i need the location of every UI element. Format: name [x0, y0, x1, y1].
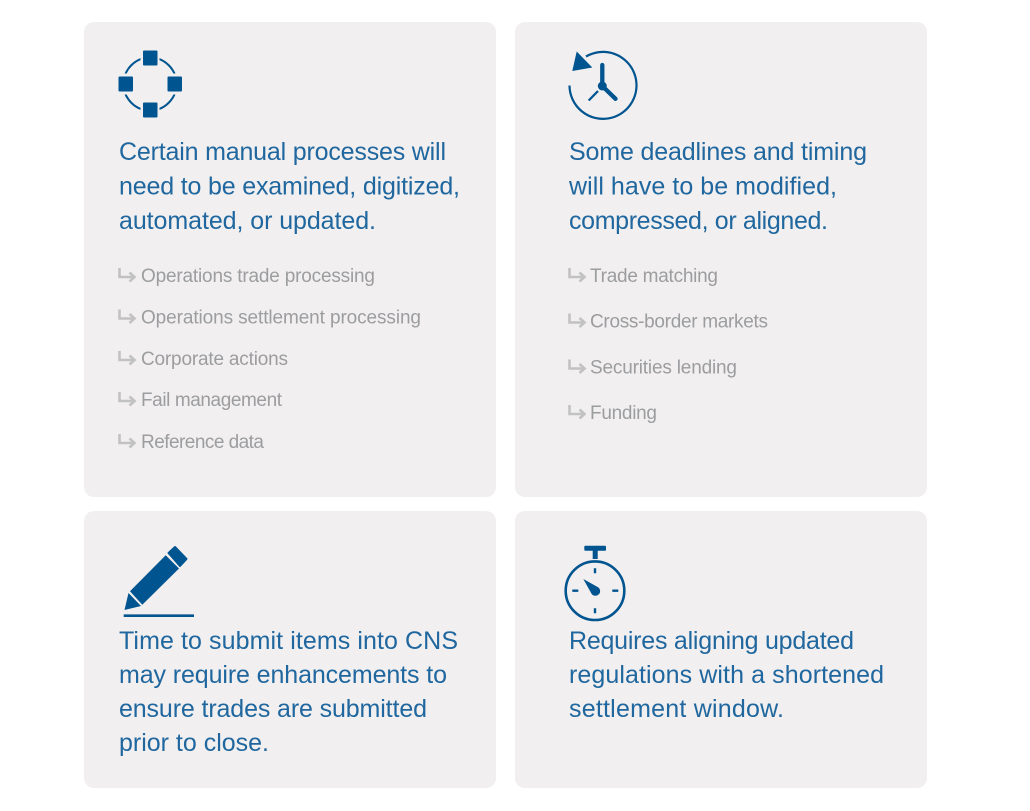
heading: submission time: prior to close. — [119, 729, 269, 757]
heading: deadlines and timing: Some deadlines and timing — [569, 138, 867, 166]
list: manual process items: Reference data — [141, 432, 264, 453]
panel: submission time — [84, 511, 496, 788]
heading: manual processes: need to be examined, digitized, — [119, 172, 460, 200]
icon: network ring — [116, 48, 184, 120]
heading: deadlines and timing: compressed, or aligned. — [569, 207, 828, 235]
list: deadline items: Securities lending — [590, 358, 737, 378]
list: manual process items: Operations trade processing — [141, 266, 375, 287]
heading: deadlines and timing: will have to be modified, — [568, 172, 837, 200]
icon: pencil — [124, 547, 194, 616]
heading: submission time: Time to submit items into CNS — [119, 627, 458, 655]
list: manual process items — [120, 266, 421, 453]
heading: submission time — [119, 627, 458, 757]
heading: deadlines and timing — [568, 138, 867, 235]
heading: manual processes: Certain manual processes will — [119, 138, 446, 166]
list: deadline items — [570, 266, 768, 424]
icon: stopwatch — [566, 546, 624, 620]
heading: regulations: regulations with a shortened — [569, 661, 884, 689]
panel: deadlines and timing — [515, 22, 927, 497]
panel: manual processes — [84, 22, 496, 497]
heading: manual processes — [119, 138, 460, 235]
panel: regulations — [515, 511, 927, 788]
icon: clock with arrow — [570, 52, 636, 119]
list: manual process items: Operations settlement processing — [141, 308, 421, 328]
list: deadline items: Cross-border markets — [590, 312, 768, 332]
list: manual process items: Corporate actions — [141, 349, 288, 370]
heading: regulations: Requires aligning updated — [569, 627, 854, 655]
heading: submission time: ensure trades are submitted — [119, 695, 427, 723]
list: deadline items: Trade matching — [590, 266, 718, 287]
list: deadline items: Funding — [590, 403, 657, 424]
heading: regulations: settlement window. — [569, 695, 784, 723]
list: manual process items: Fail management — [141, 390, 283, 411]
heading: manual processes: automated, or updated. — [119, 207, 376, 235]
heading: submission time: may require enhancements to — [119, 661, 447, 689]
heading: regulations — [569, 627, 884, 723]
